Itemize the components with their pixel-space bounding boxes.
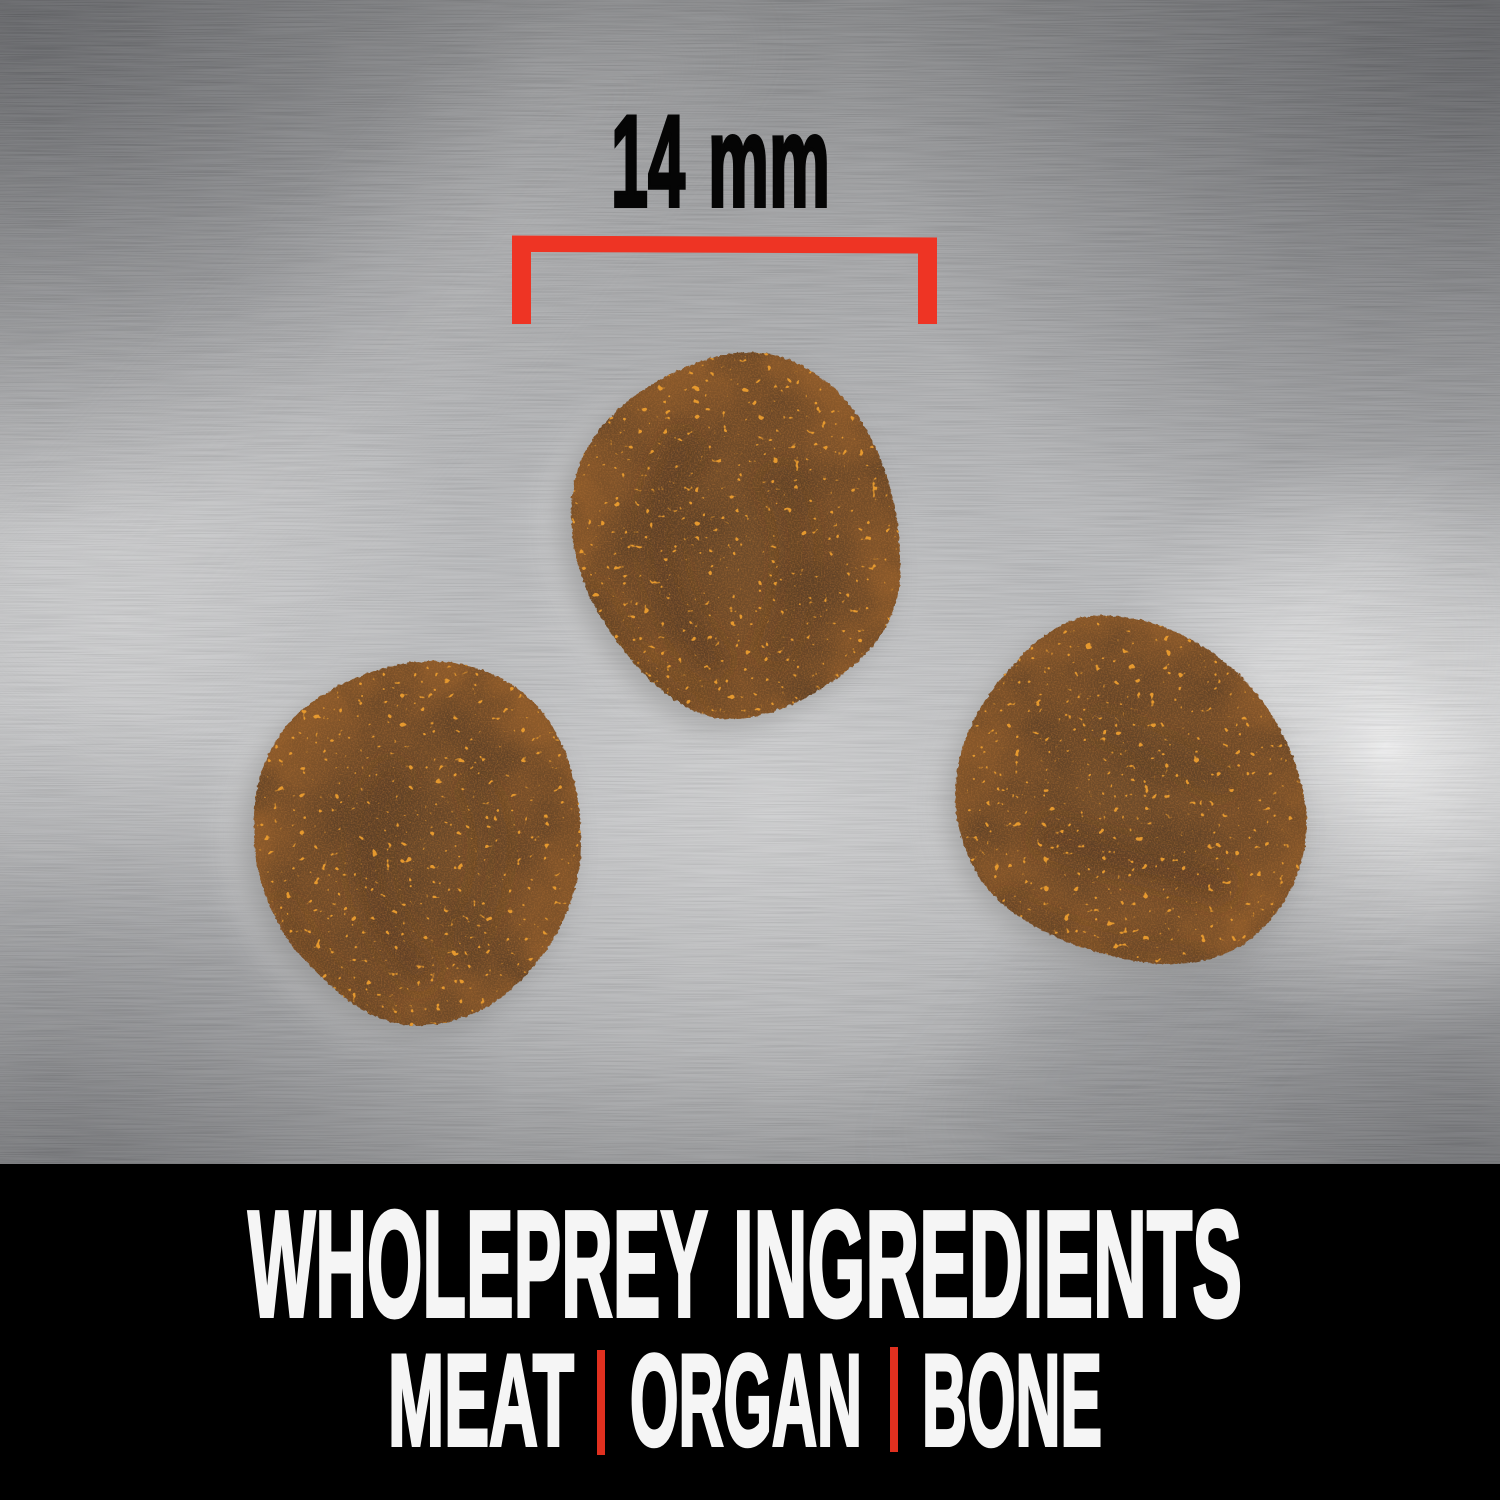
measurement label: mm	[708, 88, 830, 234]
panel: black footer band: BONE	[922, 1327, 1102, 1473]
measurement label	[611, 88, 830, 234]
icon: red measurement bracket	[512, 236, 937, 324]
kibble: centre piece	[541, 352, 900, 729]
heading: WHOLEPREY	[248, 1179, 708, 1348]
panel: brushed metal background	[0, 0, 1500, 1165]
subheading: meat, organ, bone: MEAT	[388, 1327, 574, 1473]
measurement label: 14	[611, 88, 685, 234]
subheading: meat, organ, bone: ORGAN	[630, 1327, 862, 1473]
kibble: left piece	[224, 661, 581, 1035]
subheading: meat, organ, bone	[388, 1327, 1102, 1473]
kibble: right piece	[933, 615, 1307, 976]
panel: black footer band	[0, 1164, 1500, 1500]
